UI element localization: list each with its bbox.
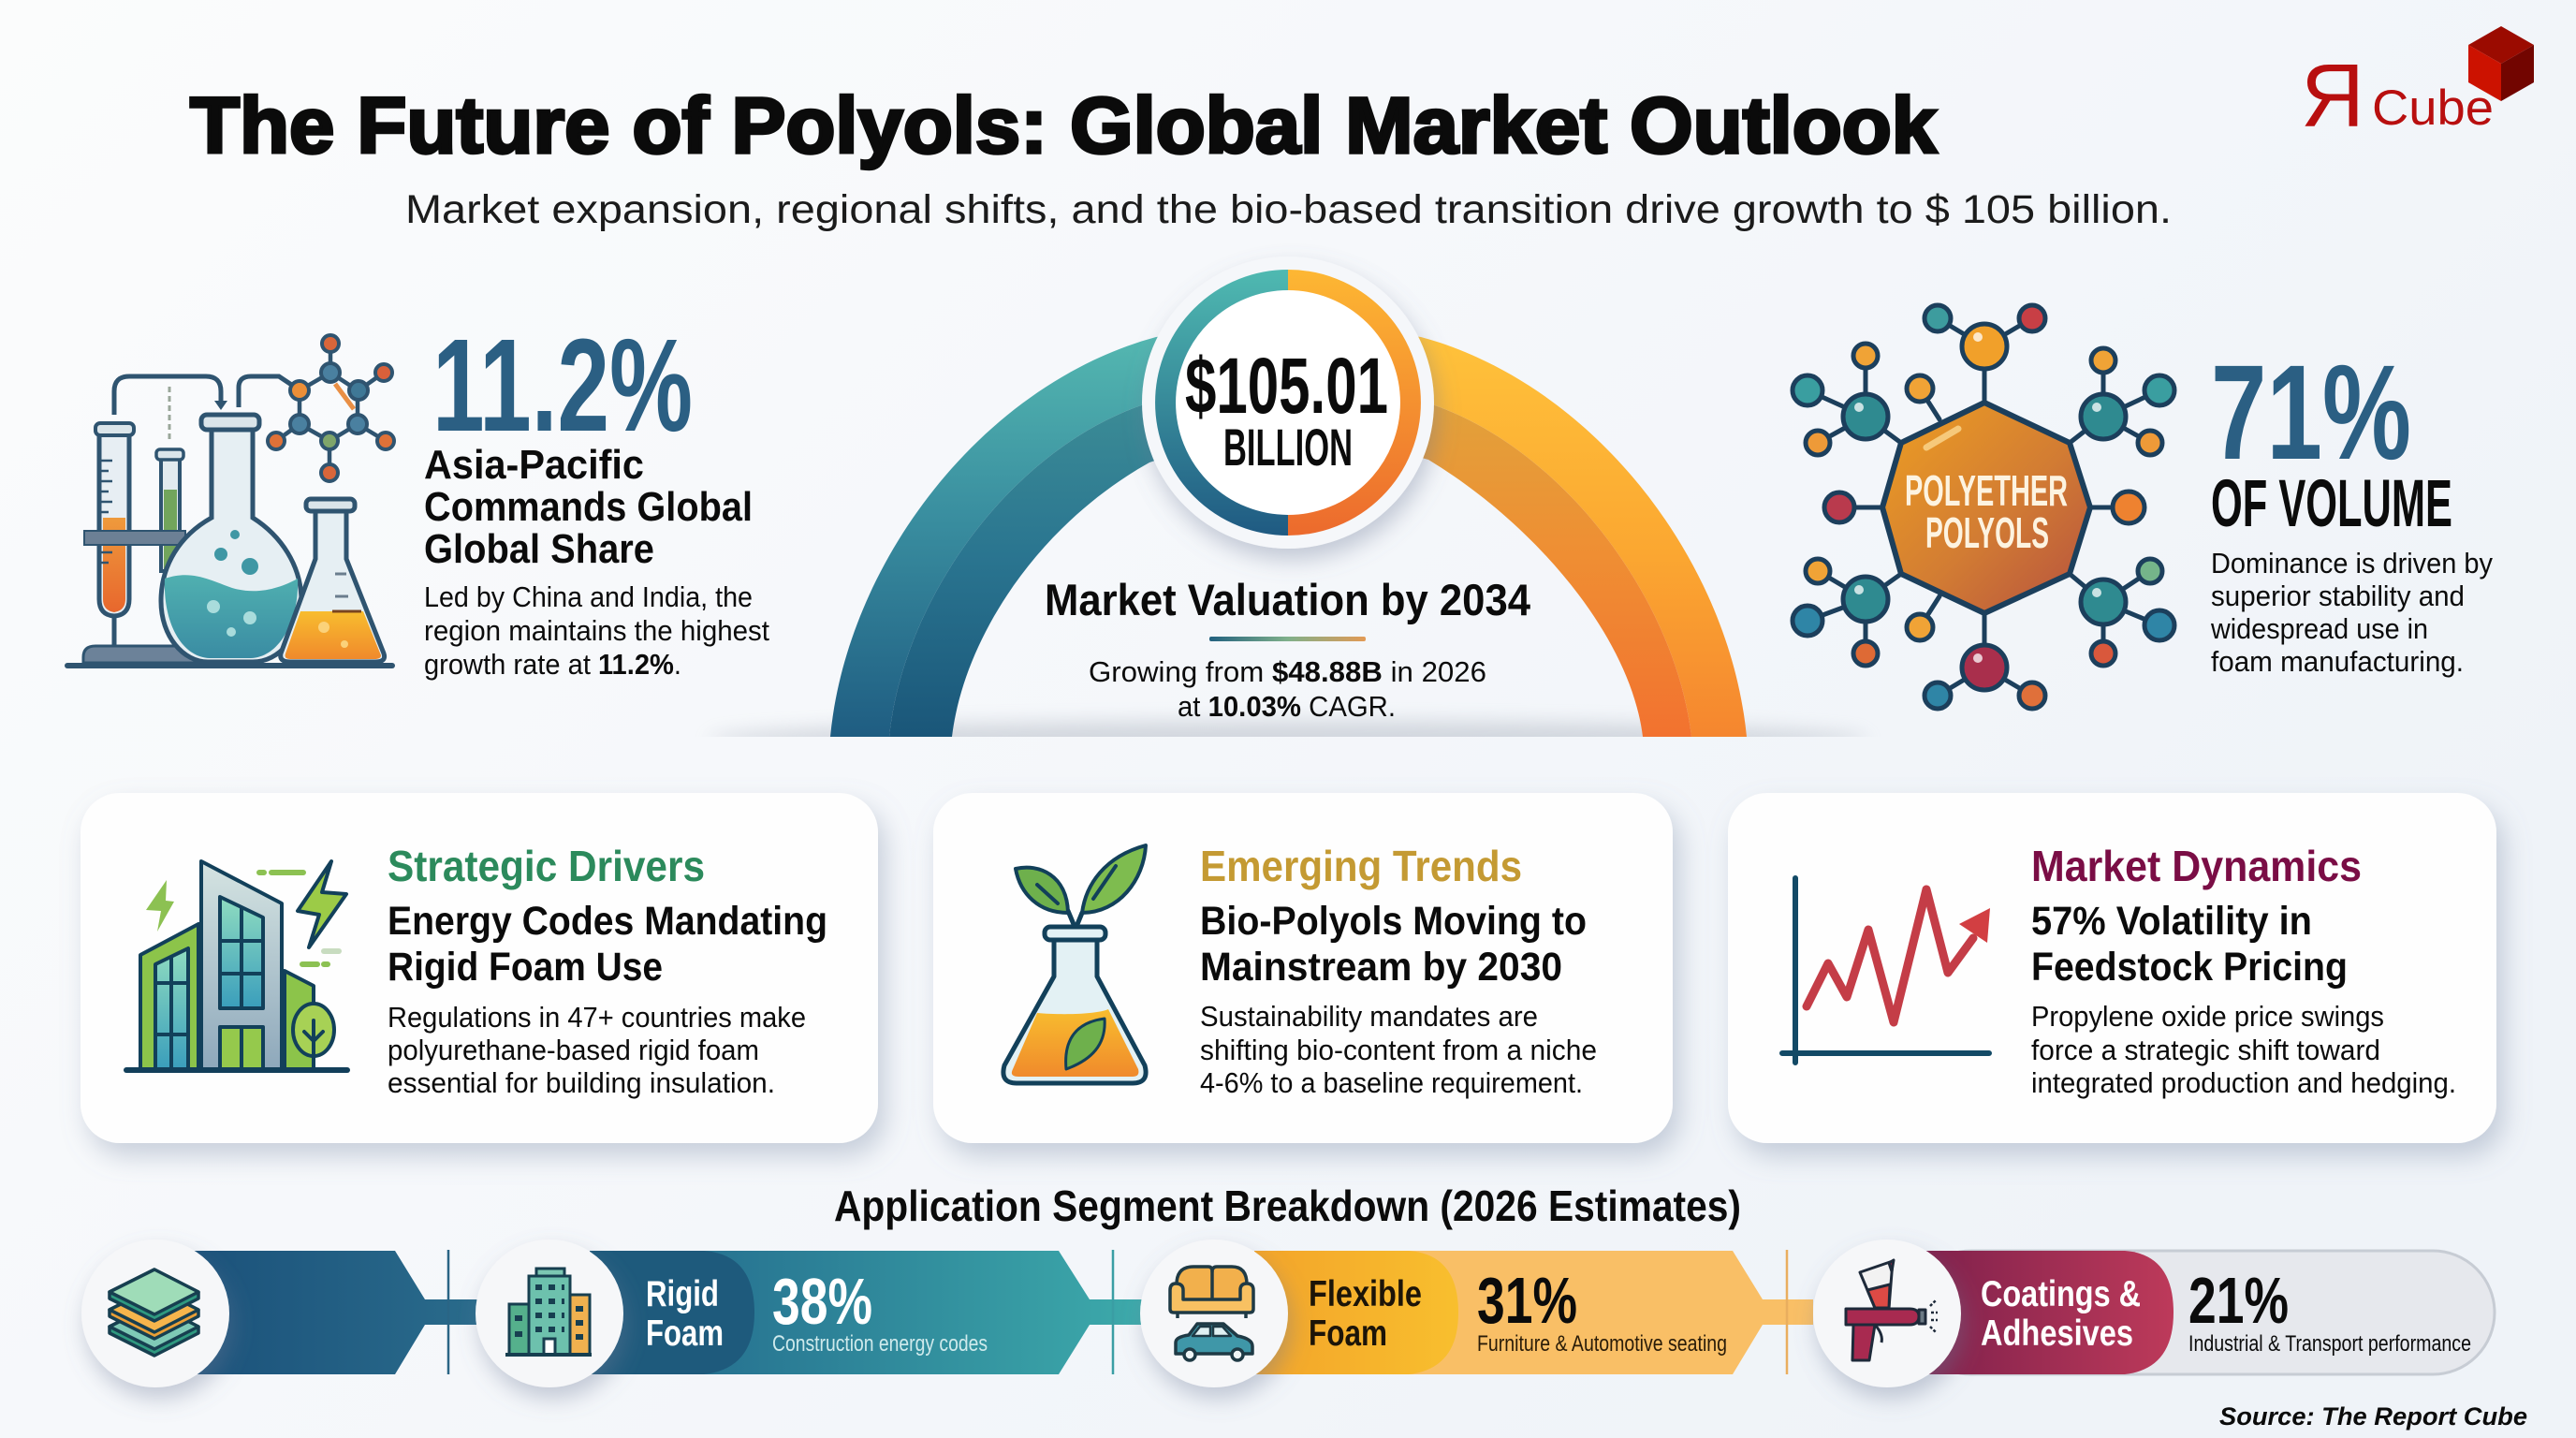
panel: application segment bar [81, 1240, 2495, 1387]
segment: flexible foam [1140, 1240, 1813, 1387]
heading: market valuation: Market Valuation by 2034 [1045, 575, 1530, 624]
label: market dynamics: Market Dynamics [2031, 842, 2362, 890]
icon: stacked layers [110, 1269, 198, 1356]
icon: office building [505, 1269, 592, 1355]
icon: sofa and car [1170, 1267, 1253, 1360]
text block: volume description: foam manufacturing. [2211, 645, 2464, 678]
segment: flexible foam: Foam [1309, 1313, 1387, 1354]
segment: rigid foam: Foam [646, 1313, 724, 1354]
heading: volatility: 57% Volatility in [2031, 899, 2312, 944]
text block: volume description: superior stability and [2211, 580, 2465, 612]
icon: laboratory glassware and molecule [67, 335, 394, 666]
text block: regulations: essential for building insulation. [388, 1066, 775, 1099]
chart: arch gauge [830, 328, 1747, 737]
text block: volume description: Dominance is driven by [2211, 547, 2493, 580]
heading: energy codes [388, 899, 827, 990]
heading: volatility: Feedstock Pricing [2031, 945, 2348, 990]
text block: regulations [388, 1001, 806, 1099]
heading: Asia-Pacific: Global Share [424, 526, 654, 572]
segment: flexible foam: Flexible [1309, 1274, 1422, 1314]
icon: polyether polyols molecule: POLYETHER [1905, 466, 2068, 515]
icon: polyether polyols molecule [1793, 305, 2174, 709]
icon: flask with sprouting leaves [1003, 845, 1146, 1083]
heading: energy codes: Rigid Foam Use [388, 945, 663, 990]
logo: RCube: Я [2301, 46, 2364, 146]
heading: Asia-Pacific [424, 442, 753, 572]
title: The Future of Polyols: Global Market Outlook [190, 81, 1937, 169]
badge: $105.01 billion [1142, 257, 1434, 549]
text block: growth detail: at 10.03% CAGR. [1178, 690, 1396, 723]
badge: $105.01 billion: $105.01 [1185, 342, 1388, 430]
text block: propylene oxide [2031, 1000, 2456, 1099]
chart: volatile price line [1782, 878, 1990, 1063]
heading: Asia-Pacific: Asia-Pacific [424, 442, 644, 488]
logo: RCube [2301, 26, 2534, 146]
segment: rigid foam: Construction energy codes [772, 1331, 988, 1357]
text block: propylene oxide: integrated production and hedging. [2031, 1066, 2456, 1099]
logo: RCube: Cube [2372, 81, 2494, 136]
text block: growth detail [1089, 655, 1486, 723]
panel: strategic drivers card [80, 793, 878, 1143]
heading: energy codes: Energy Codes Mandating [388, 899, 827, 944]
icon: polyether polyols molecule: POLYOLS [1925, 508, 2049, 557]
panel: emerging trends card [933, 793, 1673, 1143]
text block: sustainability: 4-6% to a baseline requirement. [1200, 1066, 1583, 1099]
label: strategic drivers: Strategic Drivers [388, 842, 705, 890]
segment: coatings and adhesives: Adhesives [1981, 1313, 2133, 1354]
stat: 11.2%: 11.2% [432, 311, 693, 459]
segment: flexible foam: 31% [1477, 1264, 1577, 1337]
segment: coatings and adhesives: Industrial & Transport performance [2188, 1331, 2471, 1357]
segment: rigid foam: Rigid [646, 1274, 719, 1314]
text block: Asia-Pacific description: growth rate at 11.2%. [424, 648, 681, 681]
text block: sustainability: shifting bio-content from a niche [1200, 1034, 1597, 1066]
subtitle: Market expansion, regional shifts, and the bio-based transition drive growth to $ 105 billion. [405, 187, 2172, 232]
heading: bio-polyols: Mainstream by 2030 [1200, 945, 1562, 990]
stat: 71%: 71% [2211, 337, 2411, 488]
heading: volatility [2031, 899, 2348, 990]
segment: rigid foam [476, 1240, 1151, 1387]
text block: volume description: widespread use in [2210, 612, 2428, 645]
segment: overview [81, 1240, 487, 1387]
icon: green building with lightning [126, 861, 347, 1070]
segment: flexible foam: Furniture & Automotive seating [1477, 1331, 1727, 1357]
icon: spray gun [1846, 1260, 1938, 1360]
text block: propylene oxide: Propylene oxide price swings [2031, 1000, 2384, 1033]
heading: Asia-Pacific: Commands Global [424, 484, 753, 530]
segment: coatings and adhesives [1813, 1240, 2495, 1387]
panel: market dynamics card [1728, 793, 2496, 1143]
text block: regulations: polyurethane-based rigid foam [388, 1034, 759, 1066]
source note: Source: The Report Cube [2219, 1402, 2527, 1431]
segment: coatings and adhesives: Coatings & [1981, 1274, 2141, 1314]
heading: application segment breakdown: Application Segment Breakdown (2026 Estimates) [834, 1181, 1741, 1230]
segment: coatings and adhesives: 21% [2188, 1264, 2289, 1337]
heading: bio-polyols [1200, 899, 1587, 990]
text block: sustainability: Sustainability mandates are [1200, 1000, 1538, 1033]
panel: Asia-Pacific stat [67, 311, 769, 681]
heading: bio-polyols: Bio-Polyols Moving to [1200, 899, 1587, 944]
text block: growth detail: Growing from $48.88B in 2026 [1089, 655, 1486, 688]
segment: rigid foam: 38% [772, 1265, 872, 1338]
text block: propylene oxide: force a strategic shift toward [2031, 1034, 2380, 1066]
panel: market valuation arch [708, 257, 1868, 758]
text block: regulations: Regulations in 47+ countries make [388, 1001, 806, 1034]
label: emerging trends: Emerging Trends [1200, 842, 1522, 890]
text block: volume description [2210, 547, 2493, 678]
panel: polyether volume stat [1793, 305, 2493, 709]
badge: $105.01 billion: BILLION [1223, 418, 1353, 477]
text block: Asia-Pacific description: region maintains the highest [424, 614, 769, 647]
text block: sustainability [1200, 1000, 1597, 1099]
text block: Asia-Pacific description: Led by China and India, the [424, 580, 753, 613]
text block: Asia-Pacific description [424, 580, 769, 681]
